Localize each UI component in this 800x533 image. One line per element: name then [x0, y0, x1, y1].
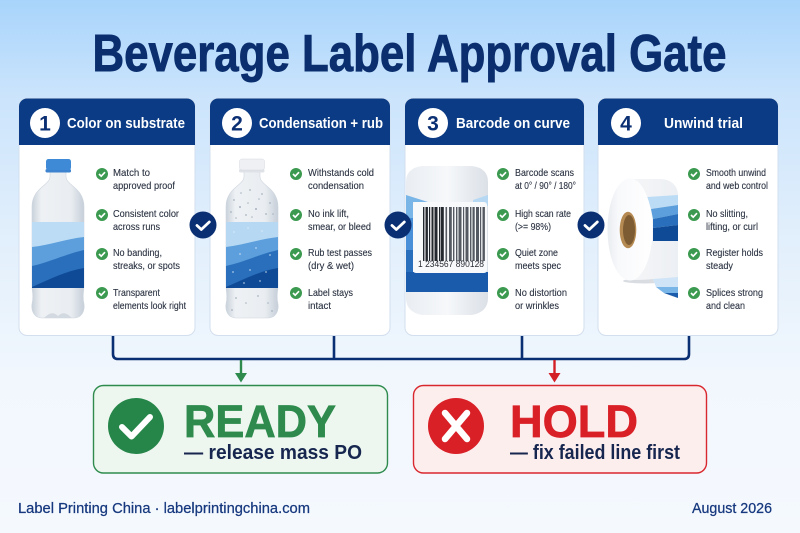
checklist 2 [290, 168, 374, 312]
icon: bottle with condensation [226, 159, 278, 318]
checklist 1 [96, 168, 186, 312]
checklist 4: No slitting, [706, 209, 748, 220]
icon: check between steps 1 and 2 [190, 212, 216, 238]
header 3: Barcode on curve [456, 115, 570, 132]
checklist 4: lifting, or curl [706, 222, 758, 233]
icon: check between steps 2 and 3 [384, 212, 412, 238]
panel: barcode on curve [405, 98, 584, 336]
checklist 2: No ink lift, [308, 209, 349, 220]
checklist 4 [688, 168, 768, 312]
hold note: — fix failed line first [510, 441, 680, 464]
panel: unwind trial [598, 98, 778, 336]
checklist 2: Withstands cold [308, 168, 374, 179]
checklist 4: Register holds [706, 248, 763, 259]
connector lines [113, 336, 689, 359]
checklist 1: across runs [113, 222, 160, 233]
icon: hold cross [428, 398, 484, 454]
footer date: August 2026 [692, 501, 772, 517]
checklist 2: smear, or bleed [308, 222, 371, 233]
icon: bottle with blue cap [32, 159, 84, 318]
arrow to ready [235, 360, 247, 382]
checklist 3: No distortion [515, 288, 567, 299]
arrow to hold [548, 360, 560, 382]
footer source: Label Printing China · labelprintingchina.com [18, 501, 310, 517]
checklist 3: at 0° / 90° / 180° [515, 181, 576, 192]
checklist 3: meets spec [515, 261, 561, 272]
checklist 4: Smooth unwind [706, 168, 766, 179]
checklist 1: Transparent [113, 288, 160, 299]
header 3 [405, 98, 584, 145]
ready outcome box [94, 386, 388, 473]
checklist 1: approved proof [113, 181, 175, 192]
checklist 2: condensation [308, 181, 364, 192]
checklist 1: streaks, or spots [113, 261, 180, 272]
checklist 3: (>= 98%) [515, 222, 551, 233]
image: label roll [608, 178, 678, 298]
header 3: 3 [427, 112, 439, 136]
panel: condensation + rub [210, 98, 390, 336]
checklist 1: Consistent color [113, 209, 180, 220]
header 2: Condensation + rub [259, 115, 383, 132]
header 1: Color on substrate [67, 115, 185, 132]
header 4: Unwind trial [664, 115, 743, 132]
header 2: 2 [231, 112, 243, 136]
header 2 [210, 98, 390, 145]
checklist 4: and clean [706, 301, 745, 312]
checklist 3 [497, 168, 576, 312]
ready heading: READY [184, 396, 336, 447]
checklist 4: steady [706, 261, 734, 272]
panel: color on substrate [19, 98, 195, 336]
image: barcode on curved container [406, 166, 488, 315]
checklist 3: or wrinkles [515, 301, 559, 312]
icon: check between steps 3 and 4 [578, 212, 604, 238]
icon: ready check [108, 398, 164, 454]
checklist 3: Quiet zone [515, 248, 558, 259]
header 4: 4 [620, 112, 632, 136]
checklist 3: Barcode scans [515, 168, 574, 179]
checklist 2: (dry & wet) [308, 261, 354, 272]
checklist 2: Rub test passes [308, 248, 372, 259]
checklist 1: Match to [113, 168, 150, 179]
checklist 2: Label stays [308, 288, 353, 299]
hold heading: HOLD [510, 396, 638, 447]
header 4 [598, 98, 778, 145]
hold outcome box [414, 386, 706, 473]
checklist 1: elements look right [113, 301, 186, 312]
checklist 4: and web control [706, 181, 768, 192]
checklist 3: High scan rate [515, 209, 571, 220]
image: barcode on curved container: 1 234567 890128 [418, 259, 484, 270]
checklist 1: No banding, [113, 248, 162, 259]
checklist 2: intact [308, 301, 331, 312]
header 1: 1 [39, 112, 51, 136]
checklist 4: Splices strong [706, 288, 763, 299]
ready note: — release mass PO [184, 441, 362, 464]
header 1 [19, 98, 195, 145]
